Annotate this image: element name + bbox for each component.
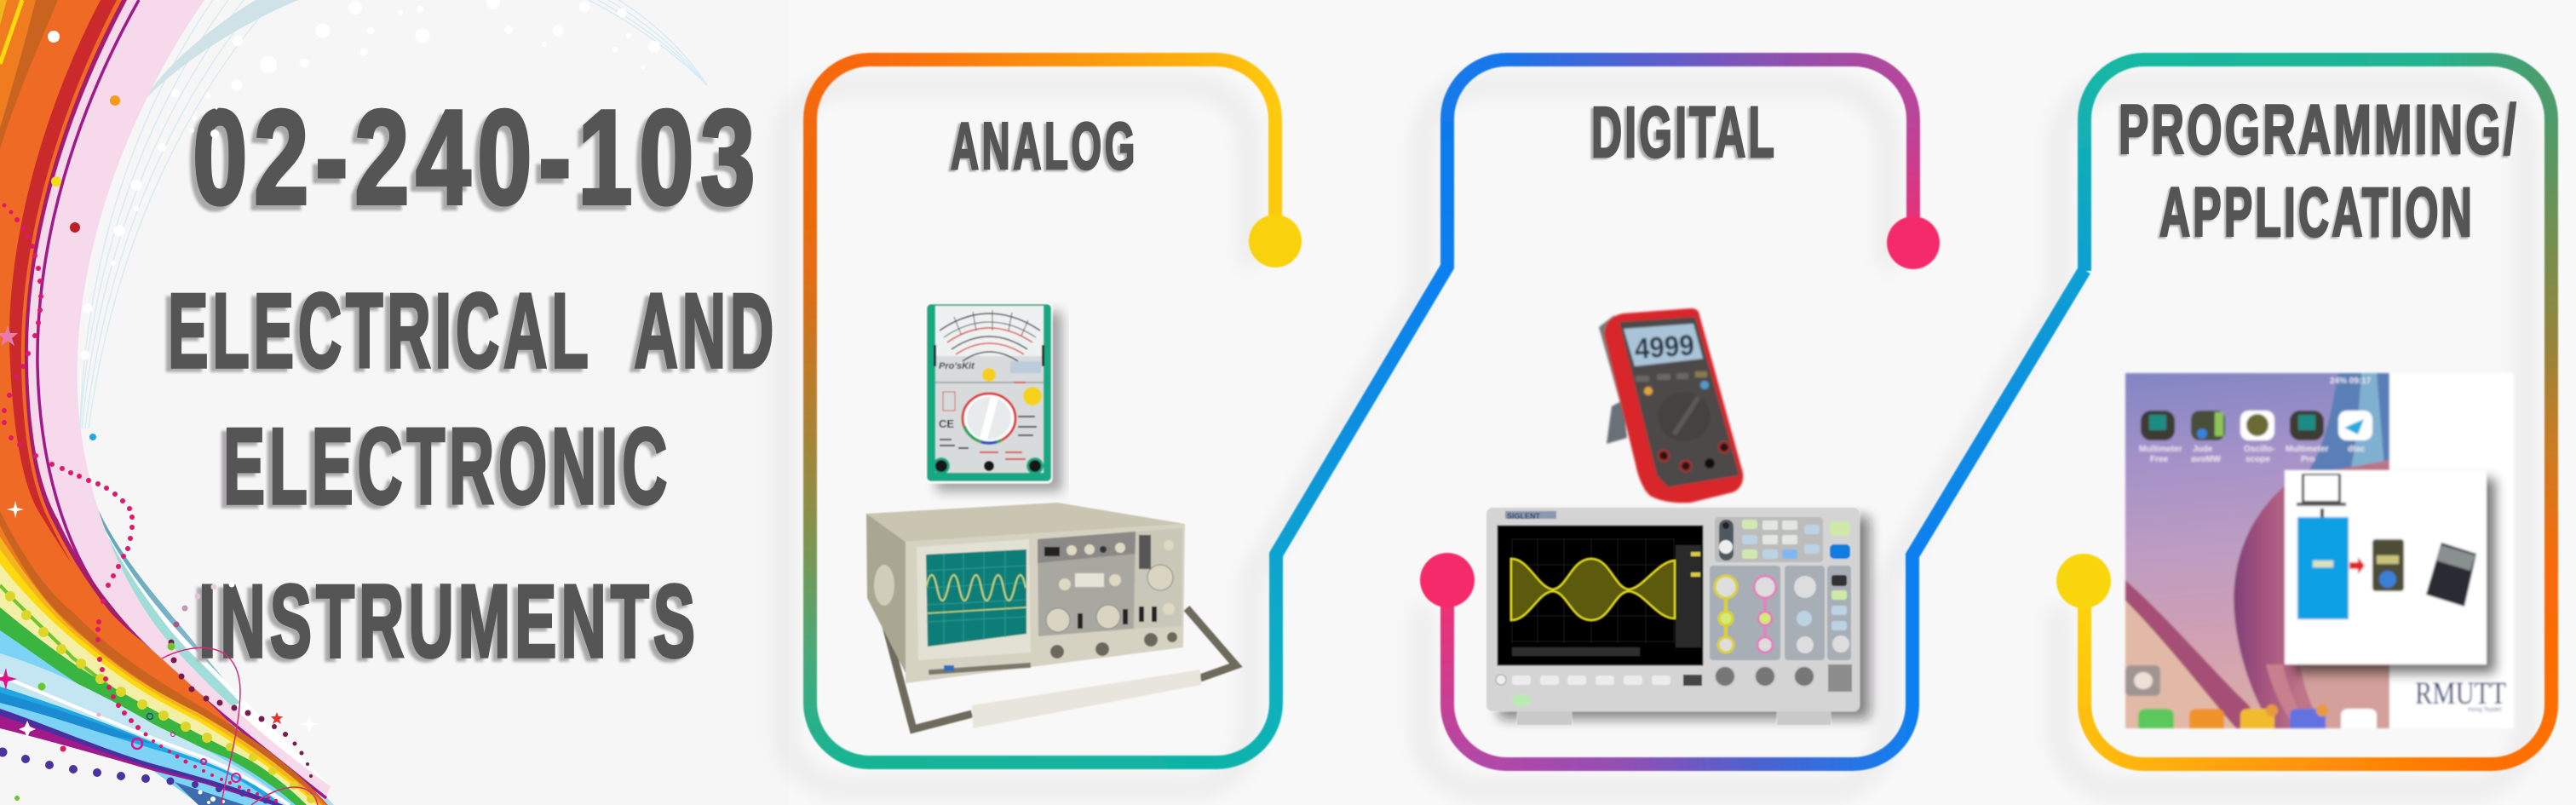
home widget and dock icons	[2125, 665, 2377, 728]
digital multimeter photo: 4999	[1634, 329, 1695, 365]
heading: analog: ANALOG	[951, 108, 1138, 183]
app labels: Jude	[2193, 445, 2213, 454]
decorative rainbow swoosh	[0, 0, 707, 805]
app labels	[2139, 377, 2372, 464]
title line 1: ELECTRICAL AND	[168, 273, 778, 390]
analog multimeter photo	[926, 303, 1062, 492]
digital oscilloscope photo: SIGLENT	[1507, 512, 1541, 520]
overlay diagram	[2285, 470, 2495, 673]
title line 3: INSTRUMENTS	[198, 563, 699, 679]
dots over title	[162, 107, 318, 805]
title: course code: 02-240-103	[193, 83, 762, 233]
heading: digital: DIGITAL	[1591, 92, 1777, 172]
title line 2: ELECTRONIC	[223, 405, 671, 526]
app labels: Pro	[2301, 455, 2315, 464]
app labels: Oscillo-	[2244, 445, 2275, 454]
app labels: avoMW	[2191, 455, 2222, 464]
phone wallpaper	[2125, 373, 2389, 728]
digital multimeter photo	[1599, 308, 1743, 503]
soft shadow of connector lines	[785, 85, 2526, 790]
analog multimeter photo: CE	[939, 417, 954, 430]
digital oscilloscope photo	[1486, 508, 1870, 725]
analog multimeter photo: Pro'sKit	[939, 361, 975, 371]
connector line: analog to digital	[810, 60, 1940, 762]
app labels: scope	[2245, 455, 2270, 464]
app labels: 24% 09:17	[2330, 377, 2372, 386]
app labels: dtac	[2348, 445, 2366, 454]
app icons	[2141, 411, 2372, 440]
logo: RMUTT: RMUTT	[2415, 676, 2506, 711]
white scatter dots behind title	[80, 0, 660, 359]
programming application screenshot	[2125, 373, 2514, 728]
app labels: Multimeter	[2139, 445, 2182, 454]
logo: RMUTT: Hong Tepdet	[2468, 707, 2502, 713]
analog oscilloscope photo	[866, 503, 1236, 729]
app labels: Multimeter	[2286, 445, 2329, 454]
connector line: digital to programming	[1420, 60, 2551, 764]
app labels: Free	[2150, 455, 2169, 464]
